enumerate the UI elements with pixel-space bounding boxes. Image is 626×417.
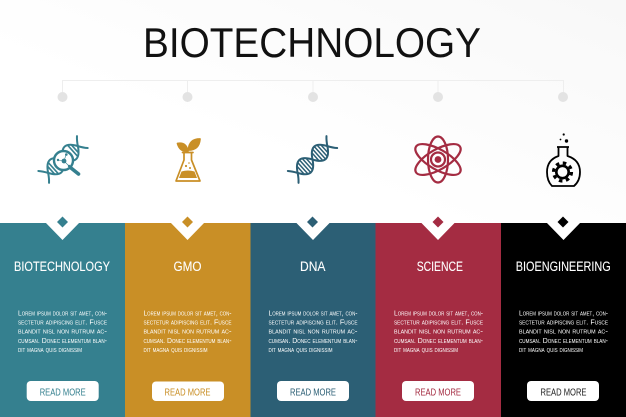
- body text: Lorem ipsum dolor sit amet, con-: [268, 308, 358, 318]
- body text: [519, 308, 609, 354]
- body text: Lorem ipsum dolor sit amet, con-: [144, 308, 232, 318]
- heading: BIOTECHNOLOGY: [14, 259, 110, 274]
- body text: blandit nisl non rutrum ac-: [394, 327, 484, 336]
- body text: cumsan. Donec elementum blan-: [519, 336, 608, 345]
- read more button: READ MORE: [40, 386, 86, 398]
- body text: Lorem ipsum dolor sit amet, con-: [394, 308, 483, 318]
- connector timeline: [58, 80, 568, 102]
- body text: sectetur adipiscing elit. Fusce: [268, 318, 358, 327]
- body text: Lorem ipsum dolor sit amet, con-: [18, 308, 107, 318]
- read more button: READ MORE: [290, 386, 336, 398]
- body text: sectetur adipiscing elit. Fusce: [18, 318, 108, 327]
- marker diamond: [558, 216, 568, 228]
- body text: cumsan. Donec elementum blan-: [394, 336, 483, 345]
- body text: dit magna quis dignissim: [519, 345, 583, 354]
- body text: blandit nisl non rutrum ac-: [519, 327, 609, 336]
- read more button: READ MORE: [540, 386, 586, 398]
- body text: [394, 308, 484, 354]
- body text: cumsan. Donec elementum blan-: [144, 336, 232, 345]
- heading: GMO: [174, 259, 202, 274]
- icon: DNA helix: [287, 136, 338, 183]
- body text: [268, 308, 358, 354]
- panel: GMO: [125, 216, 250, 417]
- icon: flask with leaves: [176, 139, 200, 181]
- icon: atom: [411, 136, 465, 182]
- body text: blandit nisl non rutrum ac-: [268, 327, 358, 336]
- marker diamond: [432, 216, 444, 228]
- body text: dit magna quis dignissim: [394, 345, 458, 354]
- icon: DNA with magnifier: [38, 136, 88, 183]
- body text: cumsan. Donec elementum blan-: [268, 336, 358, 345]
- read more button: READ MORE: [415, 386, 461, 398]
- body text: sectetur adipiscing elit. Fusce: [144, 318, 232, 327]
- body text: cumsan. Donec elementum blan-: [18, 336, 107, 345]
- body text: [144, 308, 232, 354]
- body text: dit magna quis dignissim: [268, 345, 332, 354]
- read more button: [277, 381, 349, 401]
- panel: biotechnology: [0, 216, 126, 417]
- heading: SCIENCE: [417, 259, 463, 274]
- heading: DNA: [300, 259, 326, 274]
- marker diamond: [182, 216, 193, 228]
- read more button: [27, 381, 99, 401]
- panel: bioengineering: [501, 216, 626, 417]
- body text: blandit nisl non rutrum ac-: [18, 327, 108, 336]
- body text: [18, 308, 108, 354]
- title: BIOTECHNOLOGY: [143, 19, 481, 66]
- panel: DNA: [250, 216, 376, 417]
- body text: sectetur adipiscing elit. Fusce: [519, 318, 609, 327]
- icon: flask with gear: [547, 133, 580, 186]
- read more button: [152, 382, 224, 401]
- body text: dit magna quis dignissim: [18, 345, 82, 354]
- marker diamond: [57, 216, 68, 228]
- read more button: [527, 381, 599, 401]
- body text: blandit nisl non rutrum ac-: [144, 327, 232, 336]
- marker diamond: [307, 216, 318, 228]
- body text: sectetur adipiscing elit. Fusce: [394, 318, 484, 327]
- read more button: [402, 381, 474, 401]
- body text: Lorem ipsum dolor sit amet, con-: [519, 308, 608, 318]
- body text: dit magna quis dignissim: [144, 345, 208, 354]
- read more button: READ MORE: [164, 386, 210, 398]
- panel: science: [376, 216, 501, 417]
